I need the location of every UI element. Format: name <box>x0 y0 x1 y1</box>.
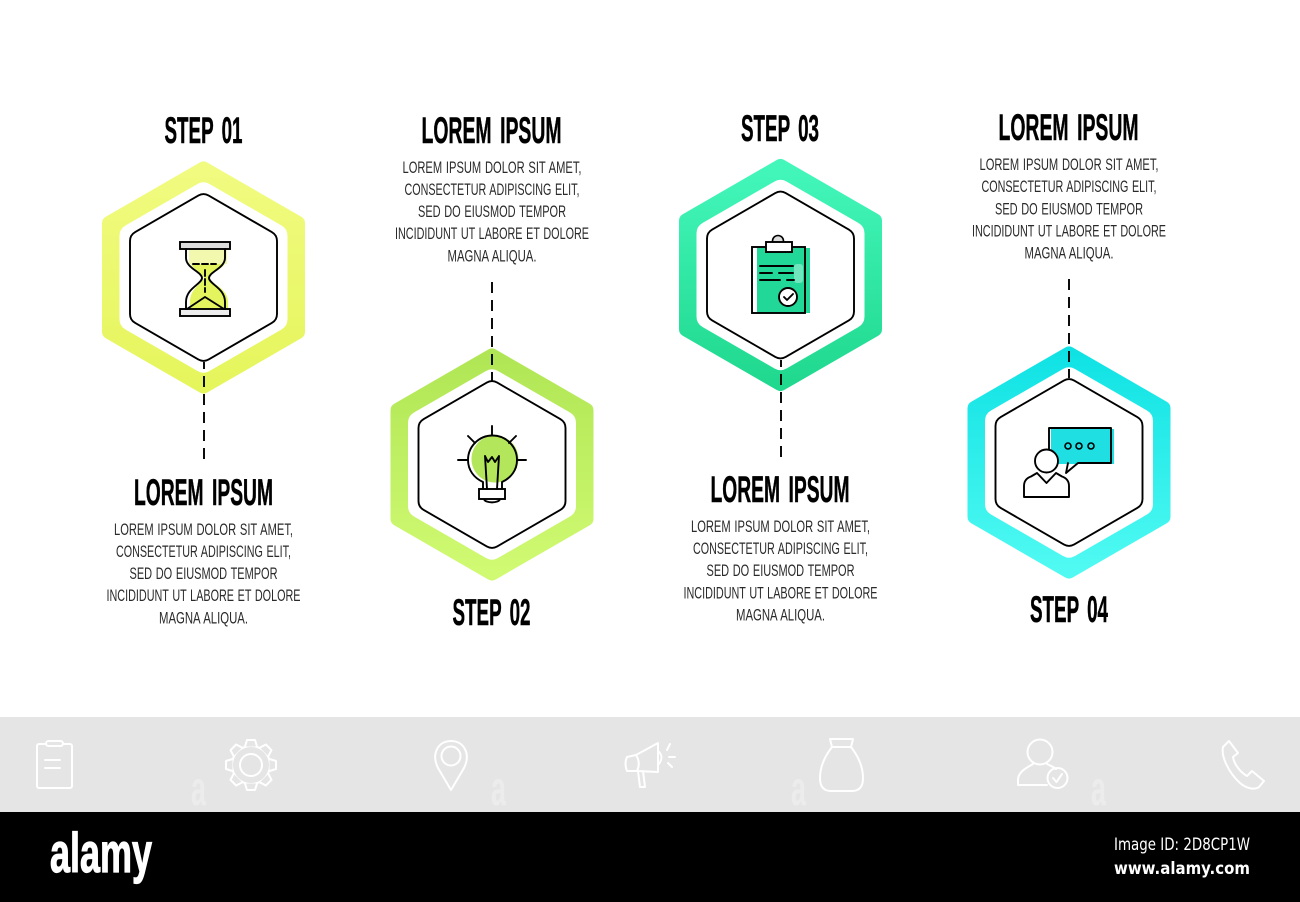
body text: step 03: CONSECTETUR ADIPISCING ELIT, <box>693 539 868 558</box>
body text: step 01: INCIDIDUNT UT LABORE ET DOLORE <box>106 586 300 605</box>
panel: step 04 <box>972 107 1166 630</box>
hexagon ring: step 04 <box>975 354 1163 571</box>
icon: strip megaphone <box>626 743 675 787</box>
body text: step 01: LOREM IPSUM DOLOR SIT AMET, <box>114 520 293 539</box>
body text: step 03: SED DO EIUSMOD TEMPOR <box>706 561 854 580</box>
hexagon ring: step 03 <box>686 166 874 384</box>
icon: strip gear <box>226 740 276 790</box>
watermark letters: a <box>491 763 506 816</box>
body text: step 01: LOREM IPSUM <box>134 472 273 513</box>
inner hexagon: step 03 <box>707 192 854 358</box>
body text: step 02: SED DO EIUSMOD TEMPOR <box>418 202 566 221</box>
body text: step 01 <box>106 472 300 628</box>
panel: step 03 <box>684 108 878 624</box>
body text: step 04: LOREM IPSUM DOLOR SIT AMET, <box>980 155 1158 174</box>
body text: step 03 <box>684 469 878 624</box>
logo: alamy: alamy <box>50 821 152 884</box>
body text: step 03: LOREM IPSUM DOLOR SIT AMET, <box>691 517 870 536</box>
heading: step 02: STEP 02 <box>452 592 530 633</box>
body text: step 02: MAGNA ALIQUA. <box>448 246 536 266</box>
body text: step 02: LOREM IPSUM <box>422 110 562 151</box>
body text: step 01: MAGNA ALIQUA. <box>159 608 248 628</box>
dashed connector: step 02 <box>491 282 493 381</box>
website: www.alamy.com <box>1114 859 1250 879</box>
icon: strip person with check <box>1018 740 1068 788</box>
icon strip band <box>0 717 1300 816</box>
icon: hourglass <box>180 242 230 316</box>
body text: step 02: CONSECTETUR ADIPISCING ELIT, <box>404 180 580 199</box>
body text: step 02: INCIDIDUNT UT LABORE ET DOLORE <box>395 224 589 243</box>
inner hexagon: step 04 <box>996 379 1142 546</box>
dashed connector: step 01 <box>203 362 205 461</box>
heading: step 03: STEP 03 <box>741 108 819 149</box>
hexagon ring: step 01 <box>110 169 298 386</box>
panel: step 01 <box>106 110 300 628</box>
icon: strip sack <box>820 739 863 791</box>
body text: step 04 <box>972 107 1166 262</box>
icon: person with speech bubble <box>1024 428 1114 497</box>
body text: step 01: CONSECTETUR ADIPISCING ELIT, <box>116 542 291 561</box>
body text: step 02 <box>395 110 589 266</box>
watermark letters: a <box>791 763 806 816</box>
body text: step 03: MAGNA ALIQUA. <box>736 606 825 624</box>
icon: strip clipboard <box>37 741 72 788</box>
body text: step 03: INCIDIDUNT UT LABORE ET DOLORE <box>684 584 878 602</box>
dashed connector: step 03 <box>780 360 782 459</box>
icon: strip phone <box>1223 741 1264 789</box>
heading: step 04: STEP 04 <box>1030 589 1108 630</box>
watermark letters: a <box>1091 763 1106 816</box>
body text: step 02: LOREM IPSUM DOLOR SIT AMET, <box>402 158 582 177</box>
body text: step 04: CONSECTETUR ADIPISCING ELIT, <box>982 177 1156 196</box>
image id: Image ID: 2D8CP1W <box>1114 835 1250 855</box>
panel: step 02 <box>395 110 589 633</box>
icon: clipboard <box>752 236 810 313</box>
inner hexagon: step 01 <box>130 194 277 361</box>
body text: step 04: INCIDIDUNT UT LABORE ET DOLORE <box>972 222 1166 240</box>
footer bar <box>0 812 1300 902</box>
heading: step 01: STEP 01 <box>164 110 242 151</box>
body text: step 04: LOREM IPSUM <box>998 107 1138 148</box>
icon: strip location pin <box>435 741 467 790</box>
icon: light bulb <box>458 426 526 502</box>
body text: step 04: SED DO EIUSMOD TEMPOR <box>995 200 1143 218</box>
body text: step 01: SED DO EIUSMOD TEMPOR <box>130 564 278 583</box>
hexagon ring: step 02 <box>398 356 586 573</box>
dashed connector: step 04 <box>1068 279 1070 378</box>
watermark letters: a <box>191 763 206 816</box>
body text: step 03: LOREM IPSUM <box>710 469 850 510</box>
inner hexagon: step 02 <box>418 381 566 548</box>
watermark letters <box>191 763 1106 816</box>
body text: step 04: MAGNA ALIQUA. <box>1024 244 1114 262</box>
